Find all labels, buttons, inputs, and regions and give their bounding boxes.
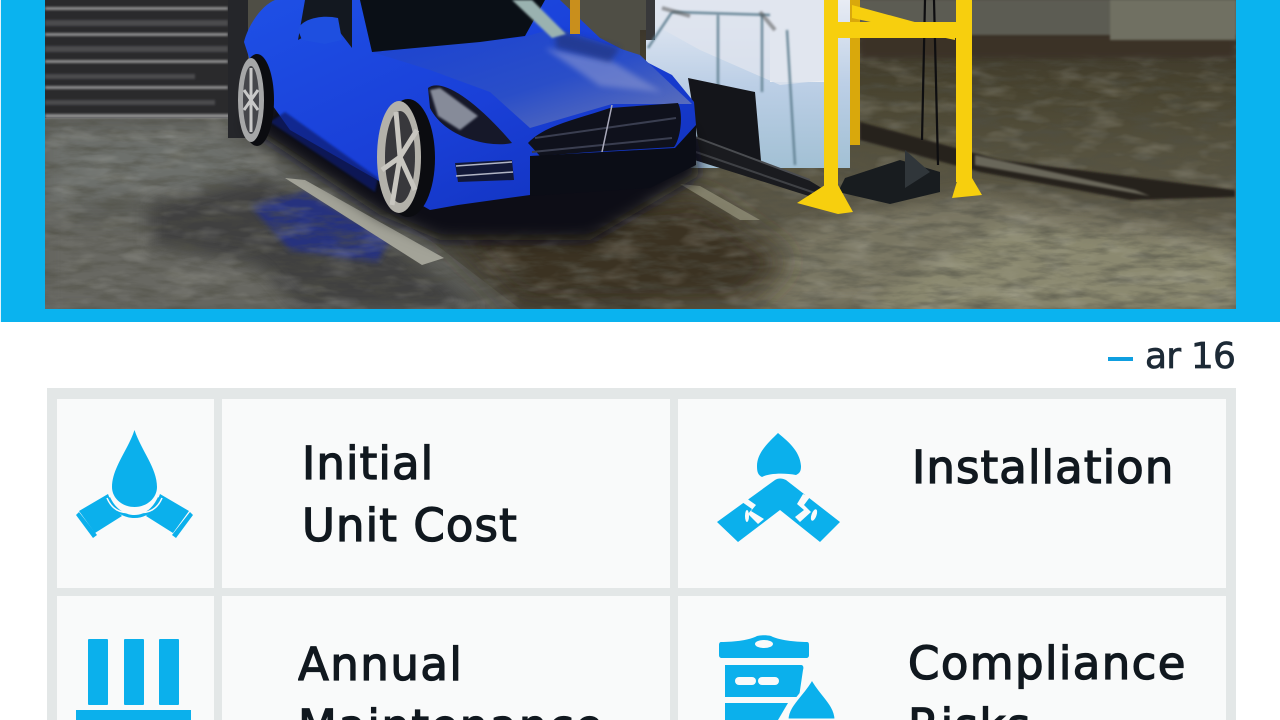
dark drainage band xyxy=(860,122,1235,200)
side window and mirror xyxy=(298,0,352,48)
cell: compliance risks xyxy=(678,596,1226,720)
cell: annual maintenance text xyxy=(222,596,670,720)
heading: Compliance Risks: Compliance xyxy=(908,637,1187,690)
heading: Annual Maintenance xyxy=(298,638,604,720)
yellow safety frame xyxy=(570,0,982,214)
hero photo panel: blue car in wash bay with blue frame xyxy=(0,0,1280,322)
windshield xyxy=(360,0,545,52)
front wheel xyxy=(377,99,435,217)
icon: drop over broken chevron pipes xyxy=(717,433,840,542)
cell: initial unit cost text xyxy=(222,399,670,588)
hood xyxy=(372,28,692,128)
comparison table panel xyxy=(47,388,1236,720)
car xyxy=(238,0,700,240)
cell: annual maintenance icon xyxy=(57,596,214,720)
shadow xyxy=(245,70,700,240)
wet brown band xyxy=(860,34,1235,58)
heading: Initial Unit Cost: Unit Cost xyxy=(302,499,518,552)
sill shadow xyxy=(270,112,378,192)
cell: installation xyxy=(678,399,1226,588)
heading: Annual Maintenance: Annual xyxy=(298,638,463,691)
floor base xyxy=(45,0,1236,309)
parking line xyxy=(285,178,444,265)
page label: dash and "ar 16": ar 16 xyxy=(1145,336,1235,377)
heading: Initial Unit Cost xyxy=(302,437,518,552)
wall and hoses xyxy=(646,0,850,168)
headlight xyxy=(428,85,512,144)
roller shutter xyxy=(45,0,248,138)
icon: water drop over pipes xyxy=(76,430,193,538)
heading: Initial Unit Cost: Initial xyxy=(302,437,434,490)
grille xyxy=(528,103,681,156)
right floor xyxy=(440,30,1236,309)
floor wet texture xyxy=(45,30,1236,309)
heading: Installation: Installation xyxy=(912,441,1174,494)
heading: Compliance Risks xyxy=(908,637,1187,720)
back wall top xyxy=(850,0,1236,35)
cell: initial unit cost icon xyxy=(57,399,214,588)
icon: filing cabinet with drop xyxy=(719,635,834,720)
bumper lower xyxy=(530,125,696,196)
dark equipment base xyxy=(688,0,940,204)
left floor xyxy=(45,118,520,309)
rear wheel xyxy=(238,54,274,146)
icon: filter cartridges xyxy=(76,639,191,720)
